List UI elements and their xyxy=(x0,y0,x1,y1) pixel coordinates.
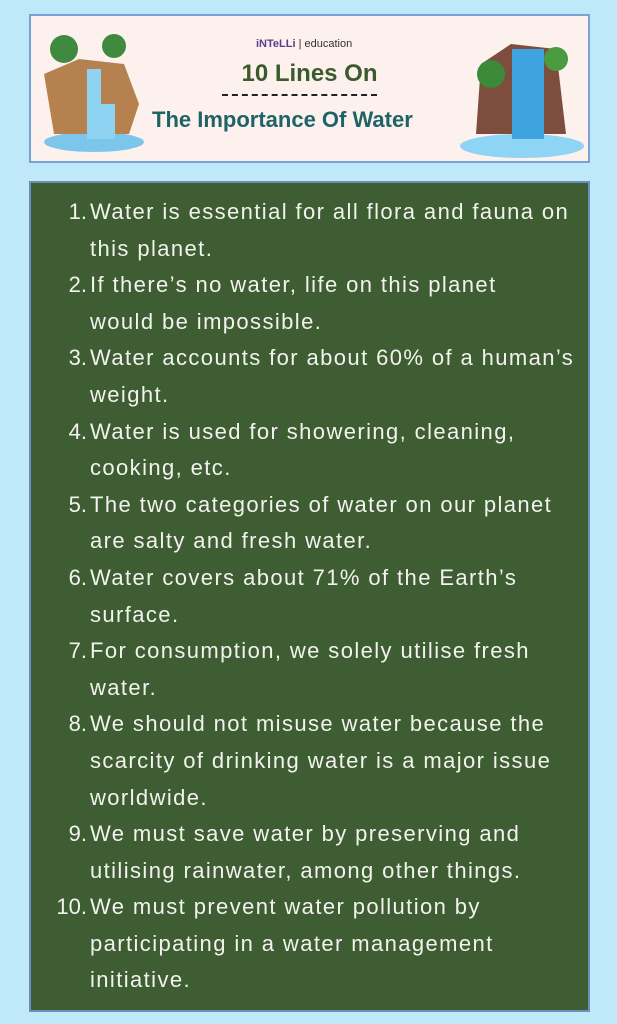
panel: ten lines list: If there’s no water, life on this planet xyxy=(90,272,497,297)
panel: ten lines list: 10. xyxy=(56,894,87,919)
panel: ten lines list: would be impossible. xyxy=(90,309,322,334)
panel: ten lines list: 1. xyxy=(69,199,87,224)
panel: ten lines list: 4. xyxy=(69,419,87,444)
panel: ten lines list: weight. xyxy=(90,382,170,407)
panel: ten lines list: 3. xyxy=(69,345,87,370)
panel: ten lines list: surface. xyxy=(90,602,179,627)
panel: ten lines list: 9. xyxy=(69,821,87,846)
panel: ten lines list: 8. xyxy=(69,711,87,736)
panel: ten lines list: Water accounts for about 60% of a human’s xyxy=(90,345,574,370)
icon: right waterfall xyxy=(460,44,584,158)
panel: ten lines list: The two categories of water on our planet xyxy=(90,492,552,517)
panel: ten lines list: Water is essential for all flora and fauna on xyxy=(90,199,569,224)
header panel xyxy=(29,14,590,163)
panel: ten lines list: 2. xyxy=(69,272,87,297)
divider dashes xyxy=(222,94,377,96)
panel: ten lines list xyxy=(29,181,590,1012)
panel: ten lines list: Water is used for showering, cleaning, xyxy=(90,419,515,444)
panel: ten lines list: are salty and fresh water. xyxy=(90,528,372,553)
logo: iNTeLLi | education xyxy=(256,38,352,50)
panel: ten lines list: 6. xyxy=(69,565,87,590)
panel: ten lines list: We must save water by preserving and xyxy=(90,821,520,846)
panel: ten lines list: utilising rainwater, among other things. xyxy=(90,858,521,883)
panel: ten lines list: We should not misuse water because the xyxy=(90,711,545,736)
panel: ten lines list: 5. xyxy=(69,492,87,517)
panel: ten lines list: worldwide. xyxy=(90,784,208,810)
panel: ten lines list: 7. xyxy=(69,638,87,663)
title: 10 Lines On xyxy=(241,60,378,87)
panel: ten lines list: We must prevent water pollution by xyxy=(90,894,481,919)
subtitle: The Importance Of Water xyxy=(152,107,413,132)
panel: ten lines list: cooking, etc. xyxy=(90,455,232,480)
panel: ten lines list: this planet. xyxy=(90,236,213,261)
icon: left waterfall xyxy=(44,34,144,152)
panel: ten lines list: initiative. xyxy=(90,967,191,992)
panel: ten lines list: Water covers about 71% of the Earth’s xyxy=(90,565,517,590)
panel: ten lines list: scarcity of drinking water is a major issue xyxy=(90,748,551,773)
panel: ten lines list: participating in a water management xyxy=(90,931,494,956)
panel: ten lines list: For consumption, we solely utilise fresh xyxy=(90,638,530,663)
panel: ten lines list: water. xyxy=(90,675,157,700)
